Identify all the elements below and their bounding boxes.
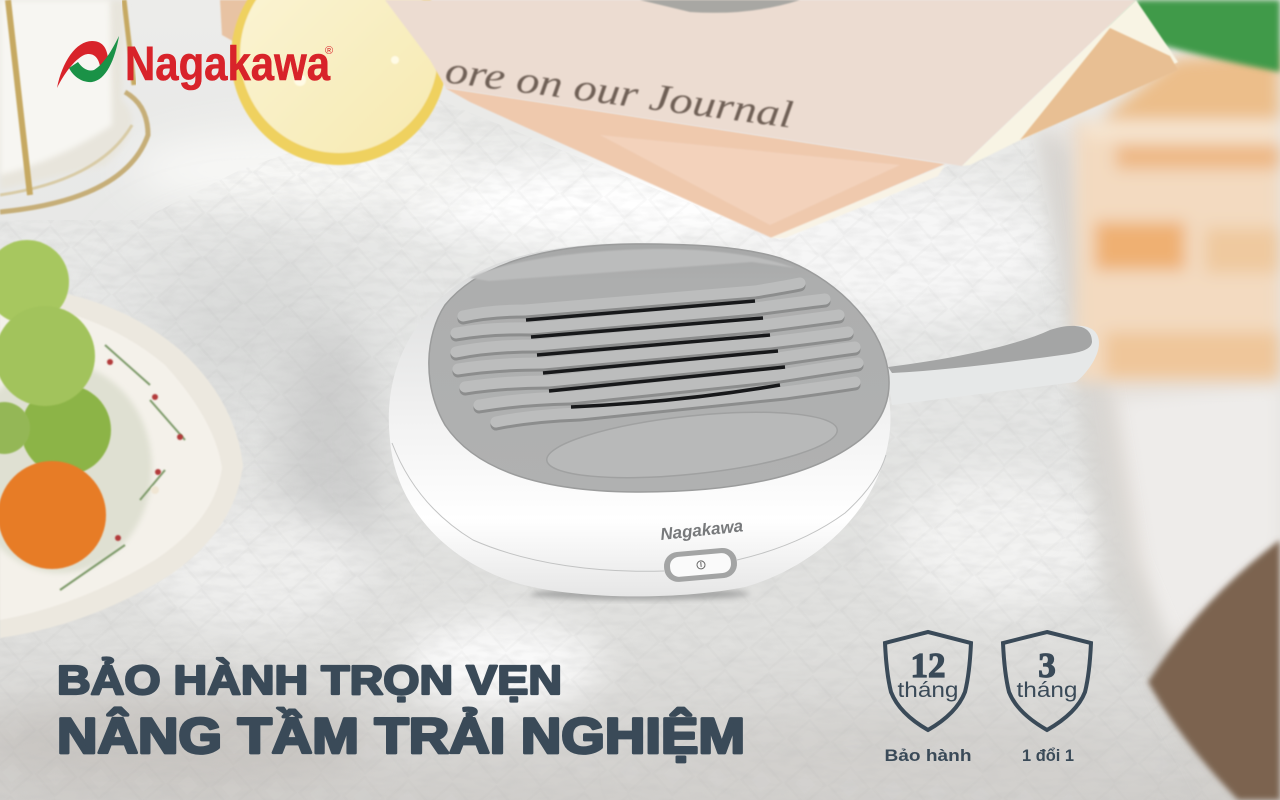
number 12: 12 [910,646,946,685]
badge: 12 tháng bảo hành [884,632,972,765]
plate with flowers [0,285,243,638]
oval grip [544,401,840,489]
right side: pale surface beyond the cloth [1035,100,1280,800]
logo: Nagakawa [57,36,333,91]
vent ribs [456,283,858,425]
green and orange fruits [0,240,111,569]
shield outline [885,632,971,730]
book cover lettering: ore on our Journal [443,49,795,137]
shield outline [1003,632,1091,730]
white body [389,243,890,596]
number 3: 3 [1038,646,1056,685]
caption: 1 đổi 1 [1022,746,1074,765]
handle strap [886,326,1099,405]
vent slots [526,301,785,407]
power button [663,547,738,583]
brown table corner, bottom right [1148,540,1280,800]
logo wordmark: Nagakawa [125,38,330,91]
heading line 2: NÂNG TẦM TRẢI NGHIỆM [57,708,745,764]
months label: tháng [898,679,958,702]
lemon slice [231,0,447,165]
peach notebook edge behind lemon [220,0,260,48]
device brand name: Nagakawa [659,516,744,544]
badge: 3 tháng 1 đổi 1 [1003,632,1091,765]
months label: tháng [1016,679,1078,702]
heading [57,657,745,764]
body seam line [392,443,886,571]
book with printed cover text [385,0,1178,166]
notebook under the book [445,88,945,238]
blurred orange rug, top right [1076,50,1280,382]
caption: Bảo hành [884,746,972,765]
product: Nagakawa portable air purifier [389,243,1099,600]
logo swoosh mark [57,36,119,88]
device shadow [530,588,750,600]
glass cup with gold frame [0,0,148,212]
heading line 1: BẢO HÀNH TRỌN VẸN [57,657,562,703]
top lip band [470,249,795,281]
green object, top right corner [1108,0,1280,72]
registered mark: ® [325,45,333,57]
grey top disc [429,244,889,492]
